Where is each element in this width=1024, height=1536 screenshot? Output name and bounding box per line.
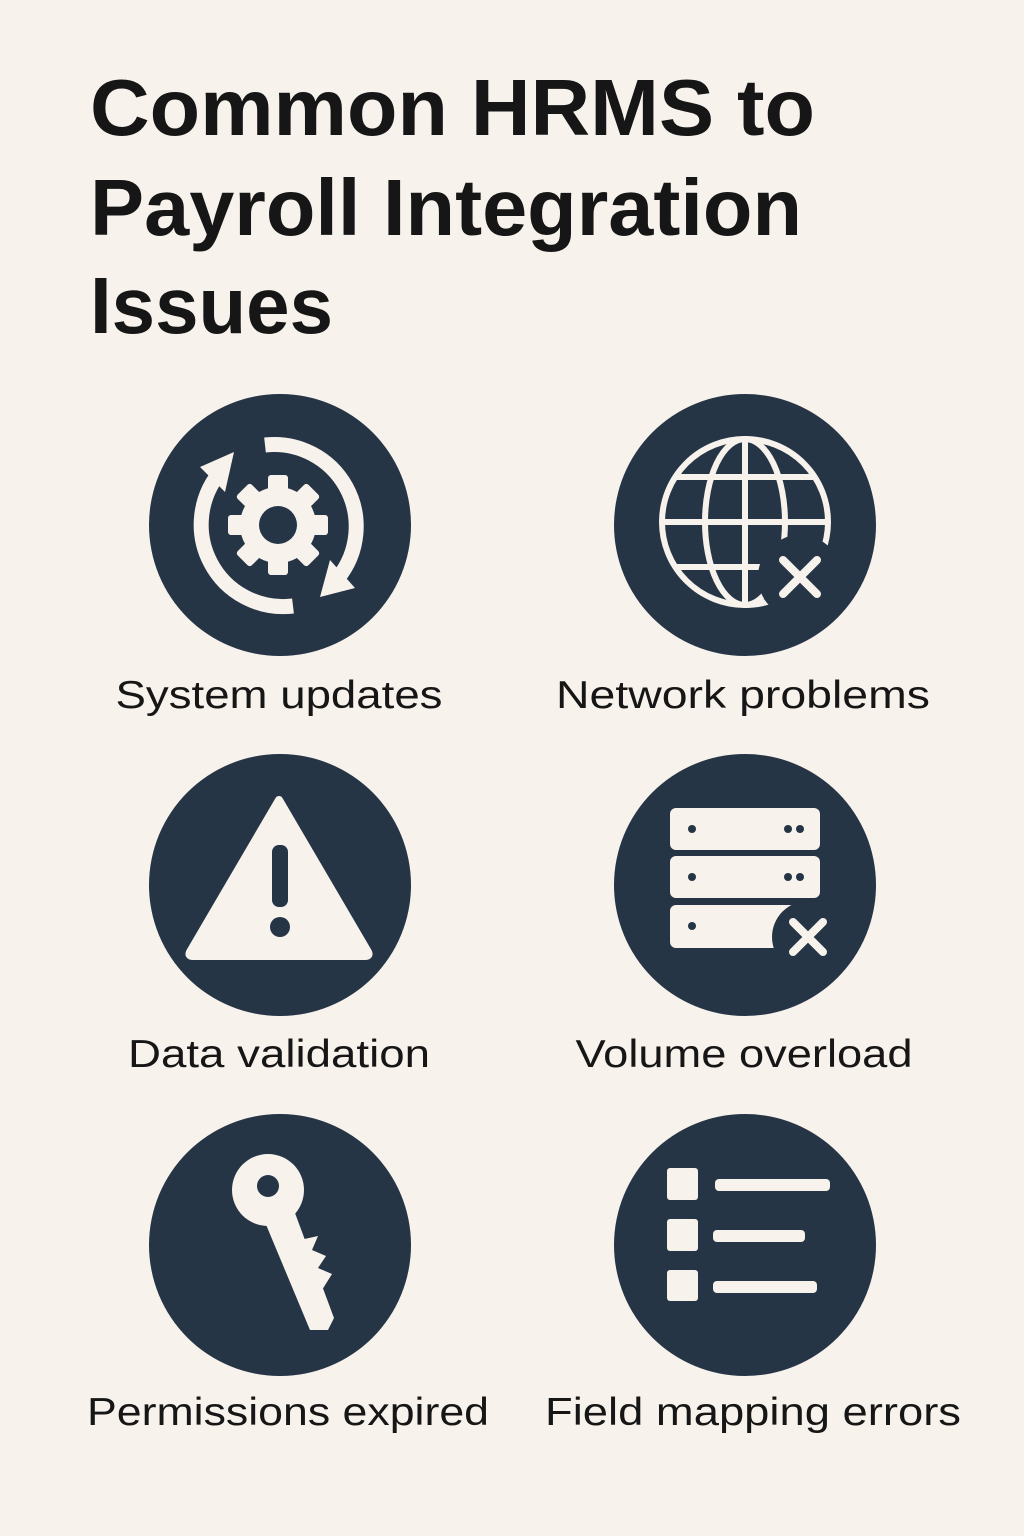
label: system updates: System updates bbox=[116, 674, 442, 717]
label: volume overload: Volume overload bbox=[576, 1033, 912, 1076]
label: field mapping errors: Field mapping errors bbox=[545, 1391, 961, 1434]
icon: permissions expired bbox=[149, 1114, 411, 1376]
icon: network problems bbox=[614, 394, 876, 656]
label: data validation: Data validation bbox=[128, 1033, 430, 1076]
icon: volume overload bbox=[614, 754, 876, 1016]
title: Common HRMS to bbox=[90, 63, 815, 152]
icon: data validation bbox=[149, 754, 411, 1016]
title bbox=[90, 63, 815, 350]
label: permissions expired: Permissions expired bbox=[87, 1391, 489, 1434]
title: Issues bbox=[90, 261, 333, 350]
icon: field mapping errors bbox=[614, 1114, 876, 1376]
icon: system updates bbox=[149, 394, 411, 656]
label: network problems: Network problems bbox=[556, 674, 930, 717]
title: Payroll Integration bbox=[90, 163, 802, 252]
